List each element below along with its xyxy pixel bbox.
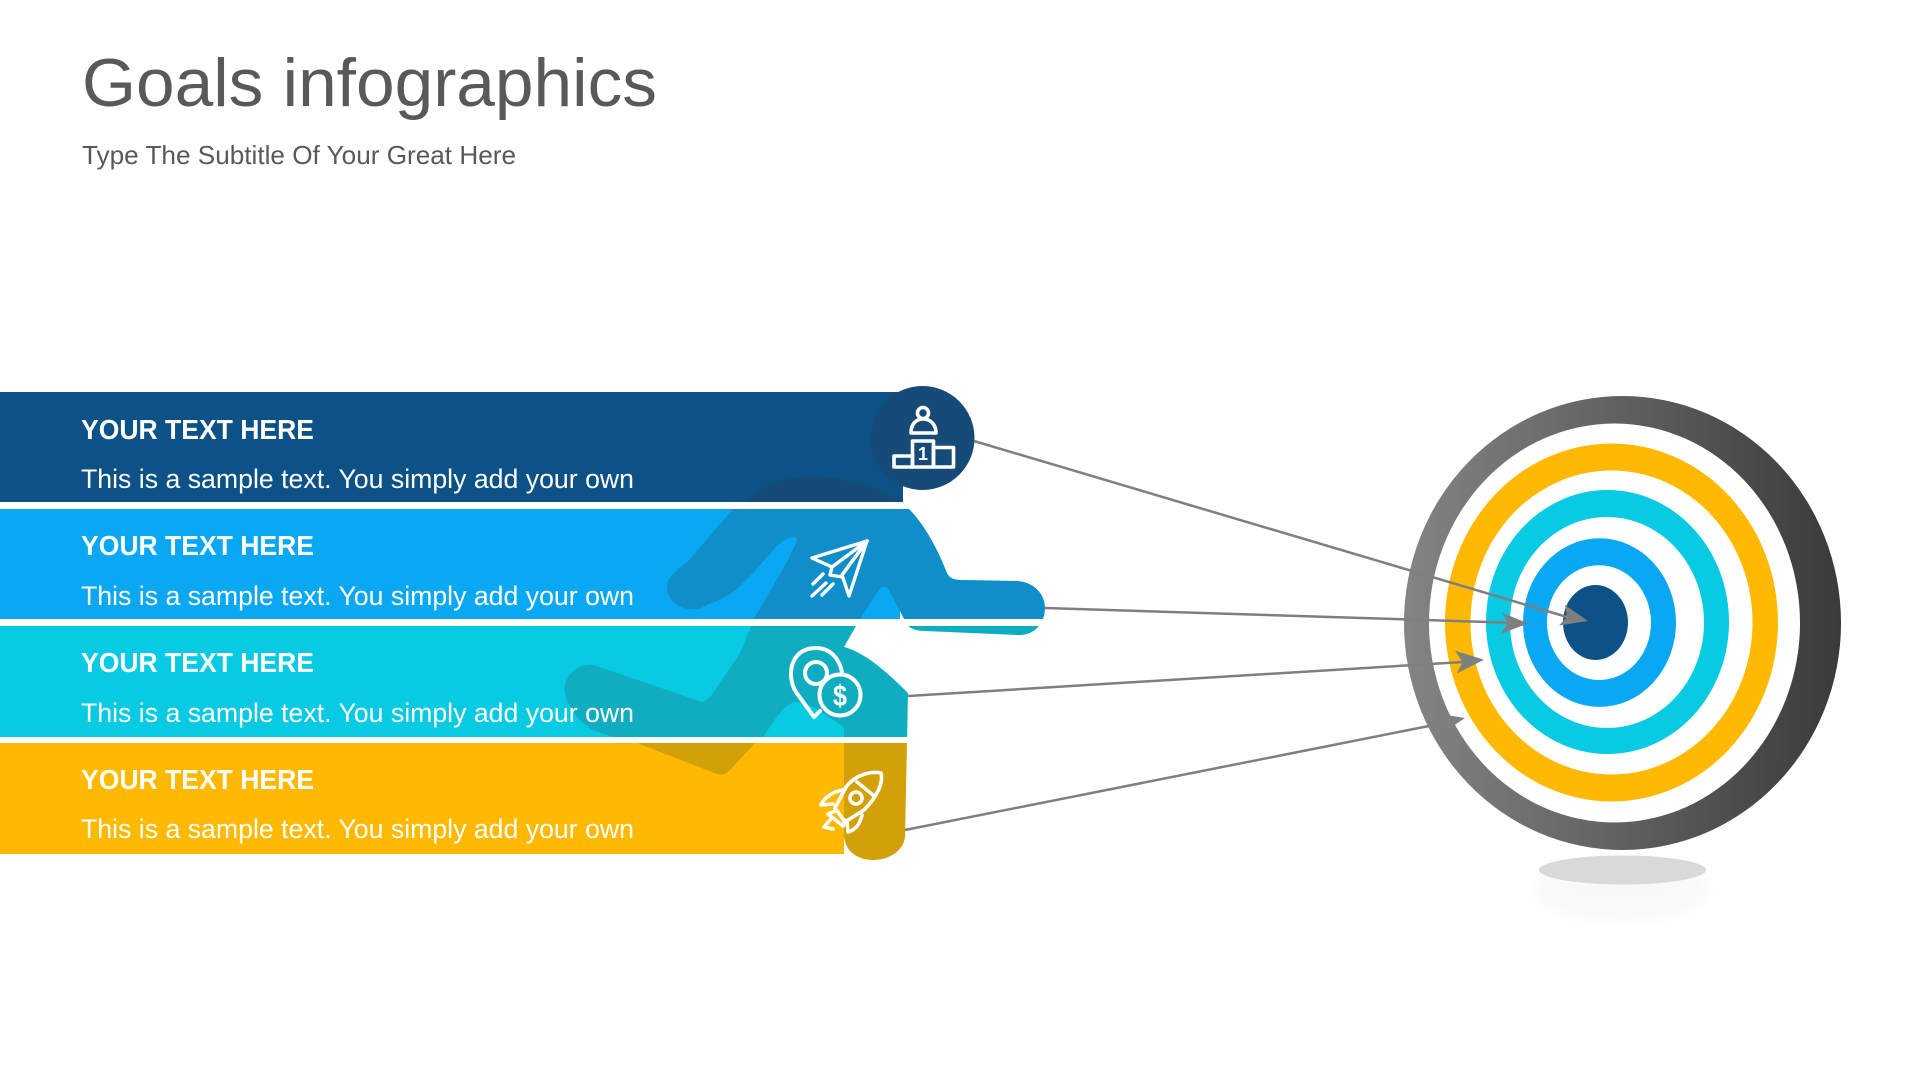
- band 4 text: YOUR TEXT HERE: [81, 764, 314, 795]
- icon: podium: [894, 408, 954, 467]
- band 1 navy: [0, 392, 903, 502]
- band 2 blue: [0, 509, 900, 619]
- icon: rocket: [821, 773, 882, 832]
- band 2 text: [81, 530, 634, 611]
- cyan ring: [1486, 490, 1729, 754]
- target board: [1404, 396, 1841, 922]
- band 3 cyan: [0, 626, 844, 737]
- icon: location pin with dollar coin: [791, 648, 860, 717]
- target shadow: [1532, 856, 1712, 922]
- gold ring: [1445, 444, 1778, 802]
- icon: podium: 1: [918, 444, 928, 464]
- band 3 text: This is a sample text. You simply add your own: [81, 698, 634, 728]
- arrow 4: [905, 714, 1465, 830]
- subtitle: Type The Subtitle Of Your Great Here: [82, 140, 516, 170]
- band 4 text: [81, 764, 634, 844]
- outer grey ring: [1404, 396, 1841, 850]
- runner silhouette: [565, 477, 1045, 860]
- band 3 text: YOUR TEXT HERE: [81, 647, 314, 678]
- band 2 text: This is a sample text. You simply add your own: [81, 581, 634, 611]
- band 1 text: YOUR TEXT HERE: [81, 414, 314, 445]
- icon: paper plane: [812, 541, 867, 596]
- bullseye: [1563, 585, 1628, 660]
- band 2 text: YOUR TEXT HERE: [81, 530, 314, 561]
- blue ring: [1523, 538, 1676, 707]
- band 4 text: This is a sample text. You simply add your own: [81, 814, 634, 844]
- head circle: [870, 386, 974, 490]
- icon: location pin with dollar coin: $: [833, 680, 847, 713]
- band 3 text: [81, 647, 634, 728]
- arrow 2: [1045, 608, 1528, 634]
- band 1 text: [81, 414, 634, 494]
- title: Goals infographics: [82, 45, 657, 121]
- arrow 3: [908, 651, 1484, 696]
- band 4 gold: [0, 743, 844, 854]
- band 1 text: This is a sample text. You simply add your own: [81, 464, 634, 494]
- arrow 1: [974, 441, 1588, 626]
